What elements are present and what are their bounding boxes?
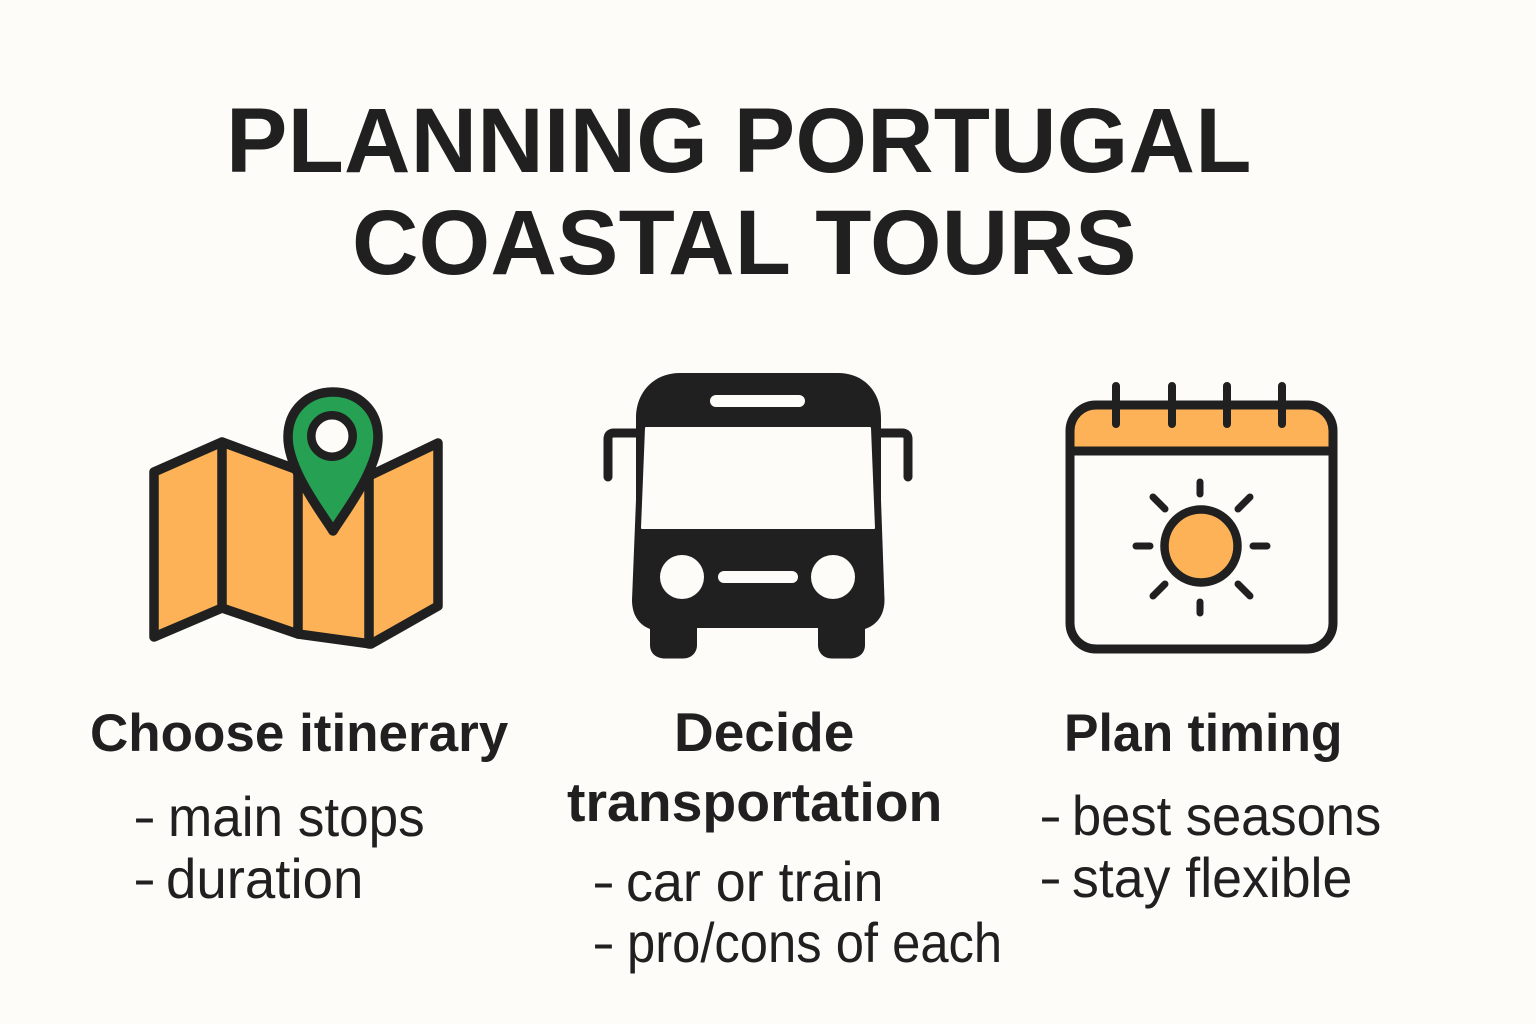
title: [226, 90, 1252, 294]
list: transportation details: car or train: [626, 850, 883, 913]
heading: decide transportation: Decide: [674, 701, 854, 763]
list: itinerary details: -: [133, 788, 156, 845]
column: choose itinerary: [90, 704, 508, 910]
list: itinerary details: duration: [166, 847, 363, 910]
list: itinerary details: [133, 785, 425, 910]
heading: decide transportation: transportation: [567, 771, 942, 833]
icon: bus: [608, 373, 908, 658]
column: plan timing: [1039, 704, 1381, 909]
heading: choose itinerary: Choose itinerary: [90, 704, 508, 763]
list: transportation details: [592, 850, 1002, 974]
column: decide transportation: [567, 701, 1002, 974]
list: transportation details: pro/cons of each: [627, 911, 1002, 974]
heading: plan timing: Plan timing: [1064, 704, 1342, 763]
list: timing details: stay flexible: [1072, 846, 1352, 909]
list: timing details: [1039, 784, 1381, 909]
list: timing details: best seasons: [1072, 784, 1381, 847]
title: PLANNING PORTUGAL: [226, 90, 1252, 192]
list: itinerary details: -: [133, 850, 156, 907]
icon: folded map with pin: [154, 392, 438, 644]
heading: decide transportation: [567, 701, 942, 833]
title: COASTAL TOURS: [352, 192, 1137, 294]
icon: calendar with sun: [1070, 386, 1333, 649]
list: transportation details: -: [592, 914, 615, 971]
list: timing details: -: [1039, 787, 1062, 844]
list: timing details: -: [1039, 849, 1062, 906]
list: itinerary details: main stops: [168, 785, 425, 848]
list: transportation details: -: [592, 853, 615, 910]
